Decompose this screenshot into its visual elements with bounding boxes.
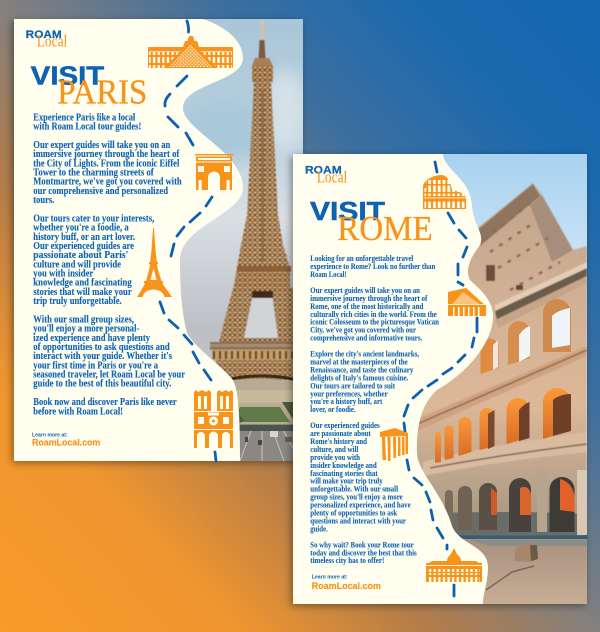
body text: Rome: will make your trip truly	[310, 476, 383, 486]
footer: Paris website: Learn more at:	[32, 433, 68, 439]
body text: Rome: Our tours are tailored to suit	[310, 380, 395, 390]
footer: Rome website	[312, 574, 381, 591]
body text: Rome: plenty of opportunities to ask	[310, 508, 397, 518]
body text: Paris: guide to the best of this beautiful city.	[33, 379, 172, 390]
body text: Rome: your preferences, whether	[310, 388, 388, 398]
body text: Paris: interact with your guide. Whether it's	[33, 351, 172, 362]
body text: Paris: Tower to the charming streets of	[33, 168, 154, 179]
body text: Paris: knowledge and fascinating	[33, 278, 132, 289]
body text: Paris: tours.	[33, 195, 55, 206]
body text: Paris	[33, 112, 185, 417]
body text: Rome: culture, and will	[310, 444, 359, 454]
logo: Roam Local Paris: ROAM	[26, 29, 62, 41]
body text: Rome: Explore the city's ancient landmarks,	[310, 348, 419, 358]
body text: Rome: Renaissance, and taste the culinary	[310, 364, 414, 374]
body text: Rome: comprehensive and informative tours.	[310, 333, 422, 343]
icon: Louvre	[148, 36, 233, 68]
photo: Eiffel Tower	[180, 19, 303, 461]
paper wave shape	[14, 19, 243, 461]
icon: Eiffel Tower	[137, 228, 172, 297]
body text: Rome: marvel at the masterpieces of the	[310, 356, 408, 366]
title: Visit Rome: ROME	[337, 209, 433, 248]
body text: Rome: So why wait? Book your Rome tour	[310, 539, 414, 549]
body text: Paris: our comprehensive and personalized	[33, 186, 168, 197]
body text: Paris: history buff, or an art lover.	[33, 232, 135, 243]
body text: Paris: whether you're a foodie, a	[33, 223, 129, 234]
body text: Paris: you'll enjoy a more personal-	[33, 324, 139, 335]
panel: Rome flyer	[293, 154, 587, 604]
panel: Paris flyer	[14, 19, 320, 461]
upper arches	[480, 299, 571, 374]
body text: Rome: personalized experience, and have	[310, 500, 411, 510]
body text: Paris: the City of Lights. From the iconic Eiffel	[33, 158, 179, 169]
body text: Paris: immersive journey through the heart of	[33, 149, 180, 160]
body text: Rome: fascinating stories that	[310, 468, 378, 478]
icon: St Peter's Basilica	[426, 548, 482, 582]
body text: Paris: Our tours cater to your interests,	[33, 214, 155, 224]
icon: Pantheon	[448, 288, 486, 316]
body text: Rome: are passionate about	[310, 428, 371, 438]
scene below tower	[230, 374, 293, 461]
body text: Rome: Rome's history and	[310, 436, 367, 446]
rock	[514, 543, 538, 562]
body text: Paris: Book now and discover Paris like never	[33, 397, 177, 408]
body text: Rome: immersive journey through the heart of	[310, 293, 428, 303]
body text: Paris: Montmartre, we've got you covered with	[33, 177, 182, 188]
body text: Rome: Our expert guides will take you on an	[310, 285, 420, 295]
body text: Rome: provide you with	[310, 452, 360, 462]
body text: Rome: questions and interact with your	[310, 516, 406, 526]
route: dashed path Rome	[404, 162, 477, 596]
photo: Colosseum	[415, 154, 587, 604]
body text: Paris: With our small group sizes,	[33, 314, 134, 326]
icon: Arc de Triomphe	[195, 154, 233, 190]
body text: Rome: today and discover the best that this	[310, 547, 417, 557]
body text: Paris: Our experienced guides are	[33, 241, 134, 252]
body text: Paris: passionate about Paris'	[33, 250, 129, 261]
body text: Rome: you're a history buff, art	[310, 396, 382, 406]
body text: Paris: you with insider	[33, 269, 94, 280]
body text: Paris: culture and will provide	[33, 259, 121, 270]
body text: Rome: insider knowledge and	[310, 460, 377, 470]
logo: Roam Local Rome	[305, 164, 348, 186]
body text: Paris: stories that will make your	[33, 287, 132, 298]
body text: Paris: your first time in Paris or you're a	[33, 360, 158, 371]
footer: Rome website: RoamLocal.com	[312, 581, 381, 591]
icon: Notre Dame	[194, 390, 233, 448]
body text: Paris: before with Roam Local!	[33, 406, 123, 417]
title: Visit Rome	[310, 196, 433, 248]
paper wave shape	[293, 154, 493, 604]
body text: Rome: group sizes, you'll enjoy a more	[310, 492, 403, 502]
body text: Rome: unforgettable. With our small	[310, 484, 398, 494]
title: Visit Paris: VISIT	[31, 60, 104, 90]
ground	[463, 539, 587, 604]
body text: Paris: of opportunities to ask questions and	[33, 342, 170, 353]
body text: Rome: delights of Italy's famous cuisine.	[310, 372, 408, 382]
middle arches	[435, 388, 571, 463]
body text: Rome: lover, or foodie.	[310, 404, 356, 414]
icon: Forum columns	[380, 428, 408, 461]
title: Visit Paris: PARIS	[57, 72, 147, 111]
body text: Rome: timeless city has to offer!	[310, 555, 384, 565]
title: Visit Paris	[31, 60, 147, 111]
body text: Paris: seasoned traveler, let Roam Local be your	[33, 370, 185, 380]
body text: Rome: iconic Colosseum to the picturesque Vatican	[310, 317, 439, 327]
body text: Rome: Our experienced guides	[310, 420, 380, 430]
footer: Paris website	[32, 433, 100, 448]
title: Visit Rome: VISIT	[310, 196, 385, 226]
body text: Rome: Roam Local!	[310, 269, 347, 279]
body text: Rome	[310, 253, 439, 565]
route: dashed path Paris	[160, 21, 216, 461]
lower arches	[445, 470, 587, 536]
logo: Roam Local Rome: Local	[317, 167, 348, 186]
body text: Rome: Rome, one of the most historically and	[310, 301, 423, 311]
body text: Rome: culturally rich cities in the world. From the	[310, 309, 437, 319]
body text: Paris: ized experience and have plenty	[33, 333, 150, 344]
icon: Colosseum	[423, 175, 466, 209]
logo: Roam Local Paris: Local	[37, 32, 68, 51]
body text: Rome: experience to Rome? Look no further than	[310, 261, 435, 271]
logo: Roam Local Paris	[26, 29, 68, 51]
footer: Rome website: Learn more at:	[312, 574, 348, 580]
body text: Paris: with Roam Local tour guides!	[33, 122, 141, 133]
footer: Paris website: RoamLocal.com	[32, 438, 100, 448]
body text: Rome: Looking for an unforgettable travel	[310, 253, 414, 263]
body text: Rome: guide.	[310, 523, 328, 533]
body text: Paris: trip truly unforgettable.	[33, 296, 122, 307]
body text: Paris: Experience Paris like a local	[33, 112, 135, 124]
body text: Rome: City, we've got you covered with our	[310, 325, 416, 335]
body text: Paris: Our expert guides will take you on an	[33, 140, 171, 151]
logo: Roam Local Rome: ROAM	[305, 164, 342, 176]
